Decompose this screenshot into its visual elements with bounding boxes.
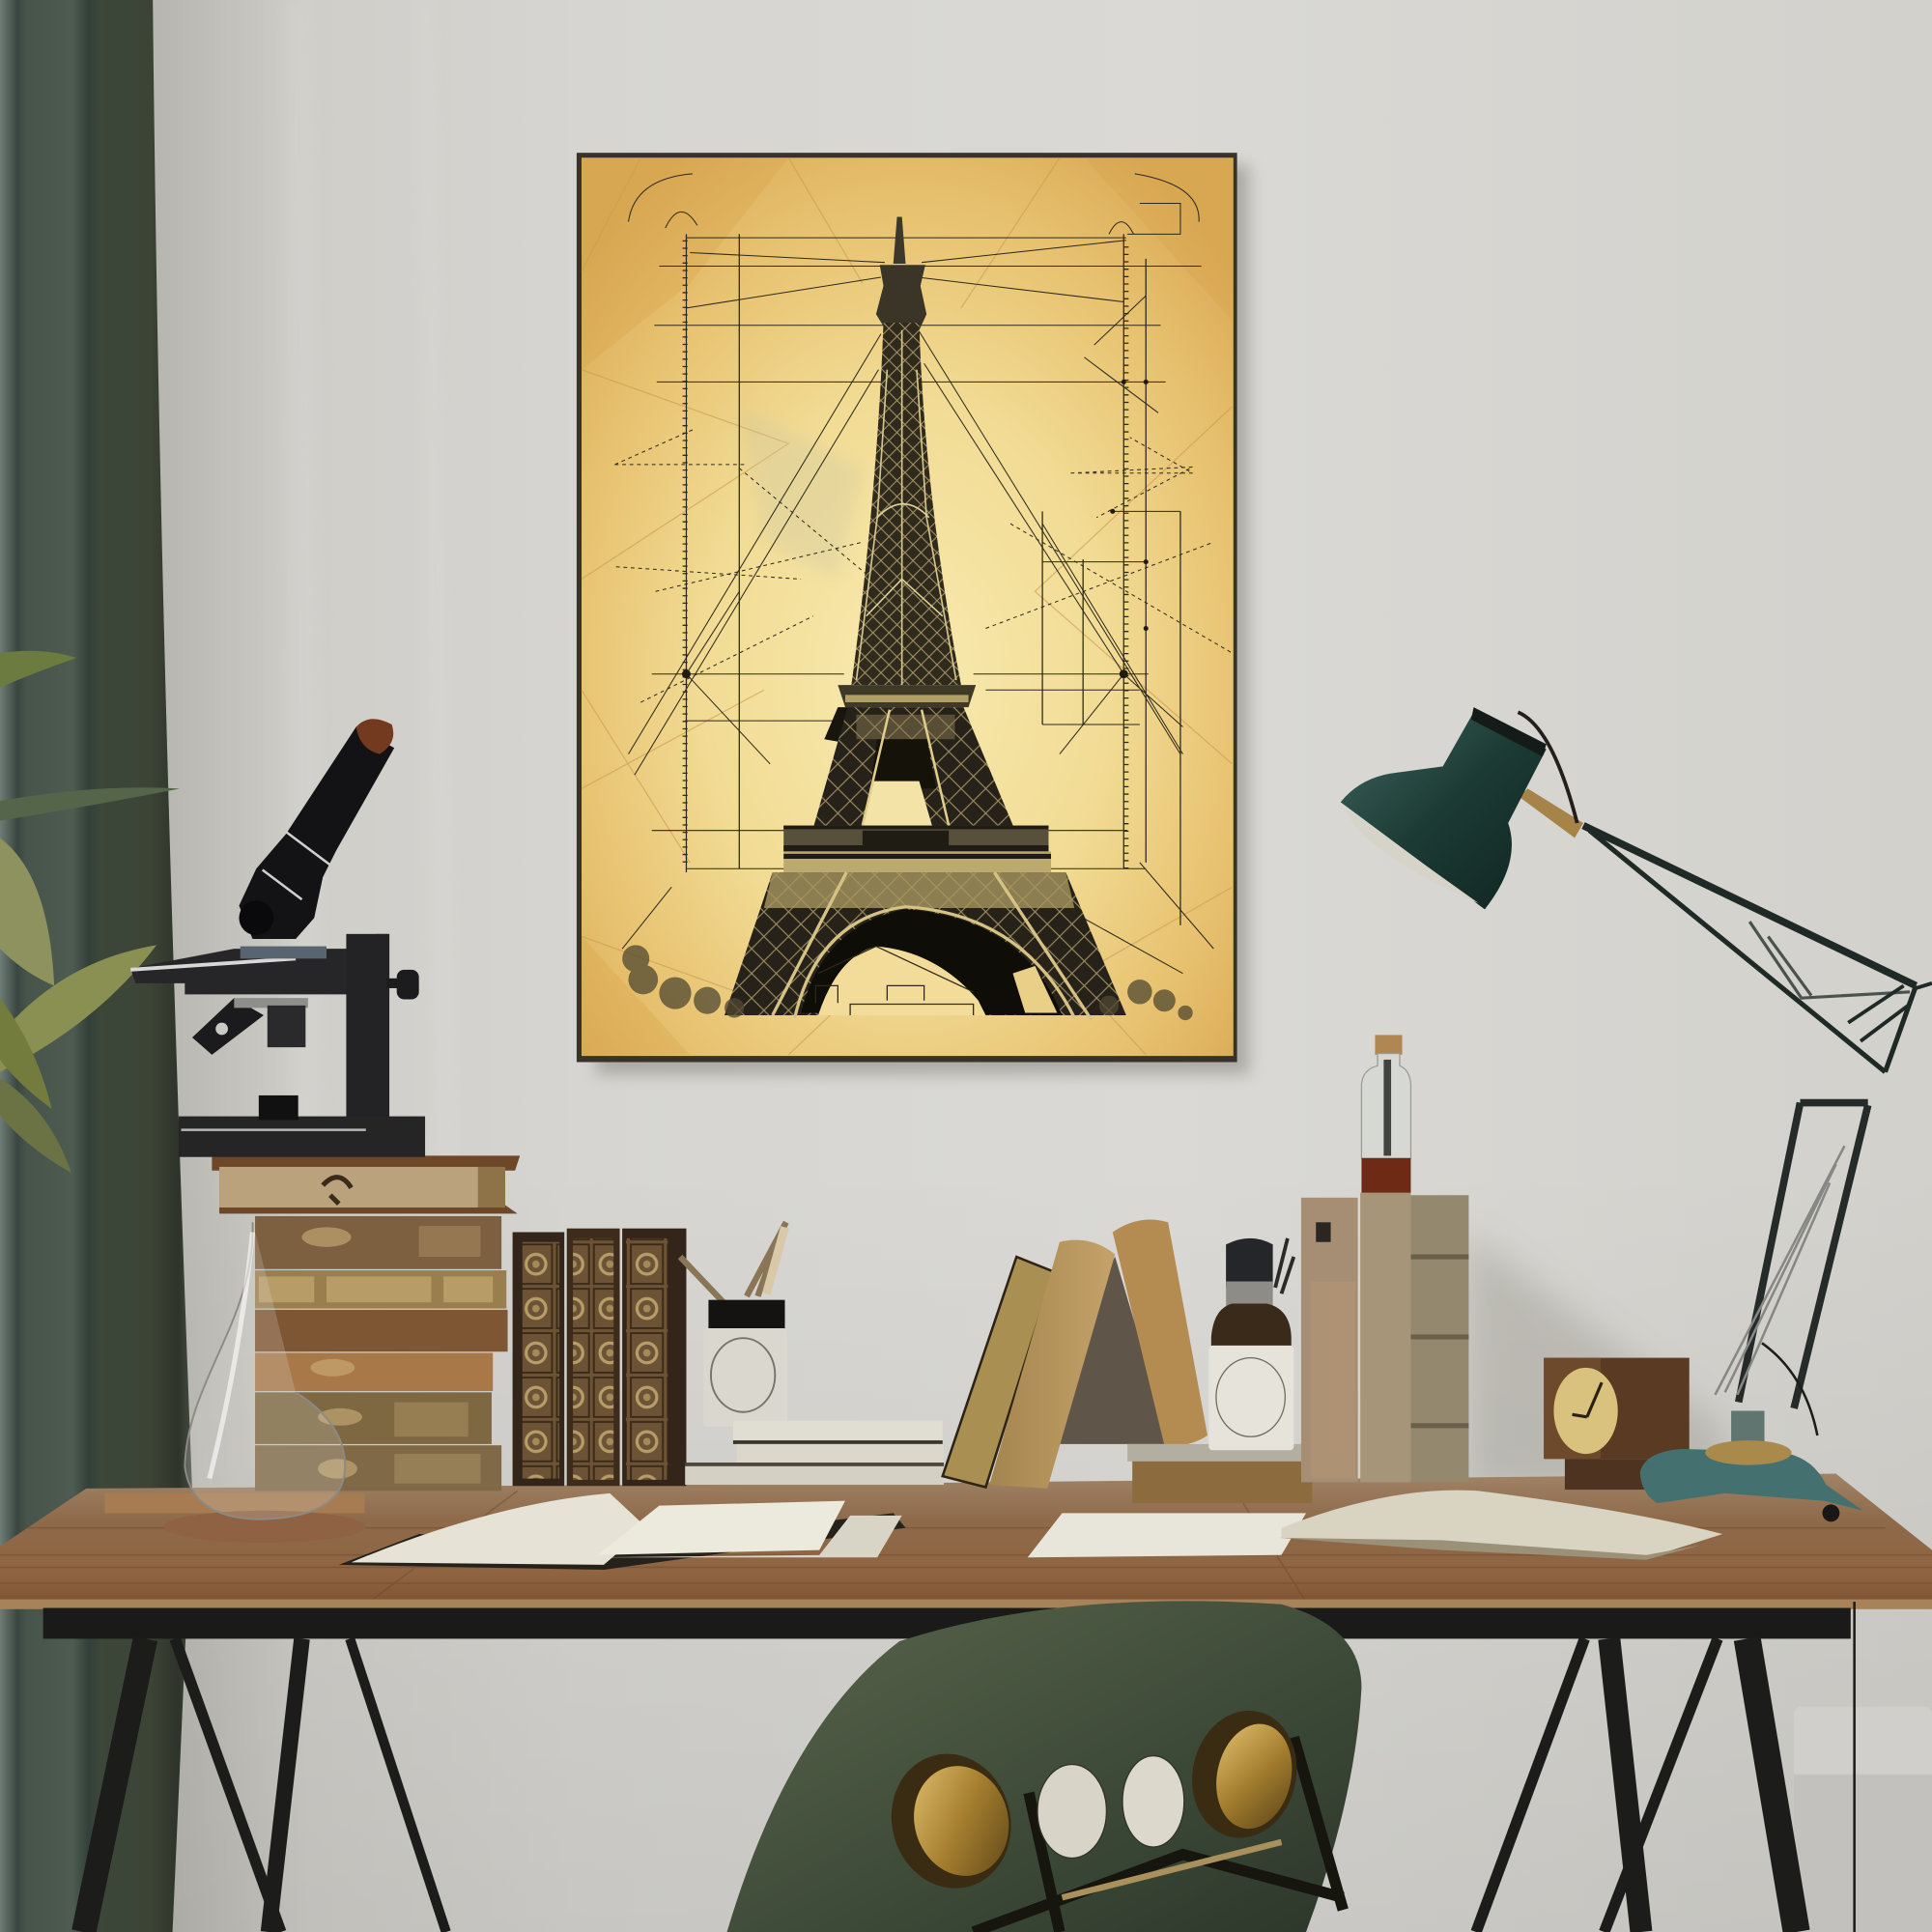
Eiffel Tower (724, 216, 1126, 1020)
dark upper arch (870, 739, 936, 788)
lamp cord (1518, 712, 1577, 823)
radiator at lower right (1794, 1707, 1932, 1932)
curtain (0, 0, 192, 1932)
desk clock (1544, 1358, 1690, 1490)
book row 1 (255, 1216, 501, 1269)
desk underframe (43, 1608, 1851, 1638)
open book right (1028, 1491, 1722, 1560)
microscope arm (346, 934, 389, 1119)
stand frame (1739, 1103, 1868, 1408)
lamp stand (1640, 1103, 1868, 1521)
microscope tube (239, 727, 394, 939)
poster frame (577, 153, 1237, 1062)
book row 6 (255, 1445, 501, 1491)
second platform (824, 707, 863, 744)
first platform (783, 826, 1048, 851)
book row 2 (255, 1270, 506, 1309)
lamp shade (1341, 712, 1547, 909)
tower spire (894, 216, 906, 264)
stand base (1640, 1449, 1863, 1511)
brass goggle right (1180, 1701, 1308, 1848)
engraved trees (622, 945, 1193, 1020)
book row 3 (255, 1310, 508, 1351)
leaning books (943, 1219, 1208, 1489)
top book (212, 1155, 520, 1213)
lamp arm (1583, 826, 1932, 1072)
pavilion under arch (815, 947, 974, 1015)
poster shadow (596, 165, 1249, 1074)
white gauge left (1037, 1765, 1106, 1858)
base legs (724, 872, 1126, 1015)
wooden coaster (104, 1493, 365, 1513)
brass goggle left (876, 1741, 1026, 1902)
plant leaves (0, 651, 180, 1173)
left trestle legs (84, 1638, 446, 1932)
annotation dots (682, 380, 1149, 678)
desk lamp (1341, 707, 1932, 1072)
pencil pot (680, 1222, 787, 1427)
small stack of white books (685, 1421, 944, 1485)
gilt ornaments (259, 1226, 493, 1484)
microscope stage (130, 934, 389, 994)
desk top (0, 1474, 1932, 1609)
beige upright books (1301, 1193, 1468, 1482)
tower upper shaft (851, 323, 961, 685)
middle arch opening (863, 781, 933, 828)
chair bracket (974, 1737, 1343, 1932)
chair back (727, 1601, 1361, 1932)
stacked antique books (212, 1155, 520, 1491)
main arch (801, 909, 1062, 1015)
poster paper (582, 157, 1234, 1056)
upright leather books (513, 1229, 686, 1486)
framed blueprint poster (577, 153, 1249, 1074)
chair (727, 1601, 1361, 1932)
gallery (783, 851, 1051, 872)
paper creases (582, 157, 1233, 1055)
flat book under ink bottle (1127, 1444, 1312, 1503)
microscope (130, 719, 425, 1157)
glass bottle with cork (1361, 1035, 1410, 1193)
book row 4 (255, 1353, 493, 1391)
right trestle legs (1476, 1602, 1855, 1932)
scale ticks (685, 241, 1126, 875)
ink bottle (1208, 1238, 1293, 1450)
tower middle legs (813, 707, 1014, 828)
lattice band (764, 872, 1074, 908)
tower top cabin (876, 265, 926, 330)
glass vase (104, 1222, 366, 1543)
white gauge right (1122, 1756, 1184, 1847)
book row 5 (255, 1392, 492, 1444)
microscope base (179, 1117, 425, 1157)
objectives (192, 998, 264, 1055)
blueprint construction lines (614, 174, 1233, 974)
open notebook left (339, 1493, 906, 1570)
